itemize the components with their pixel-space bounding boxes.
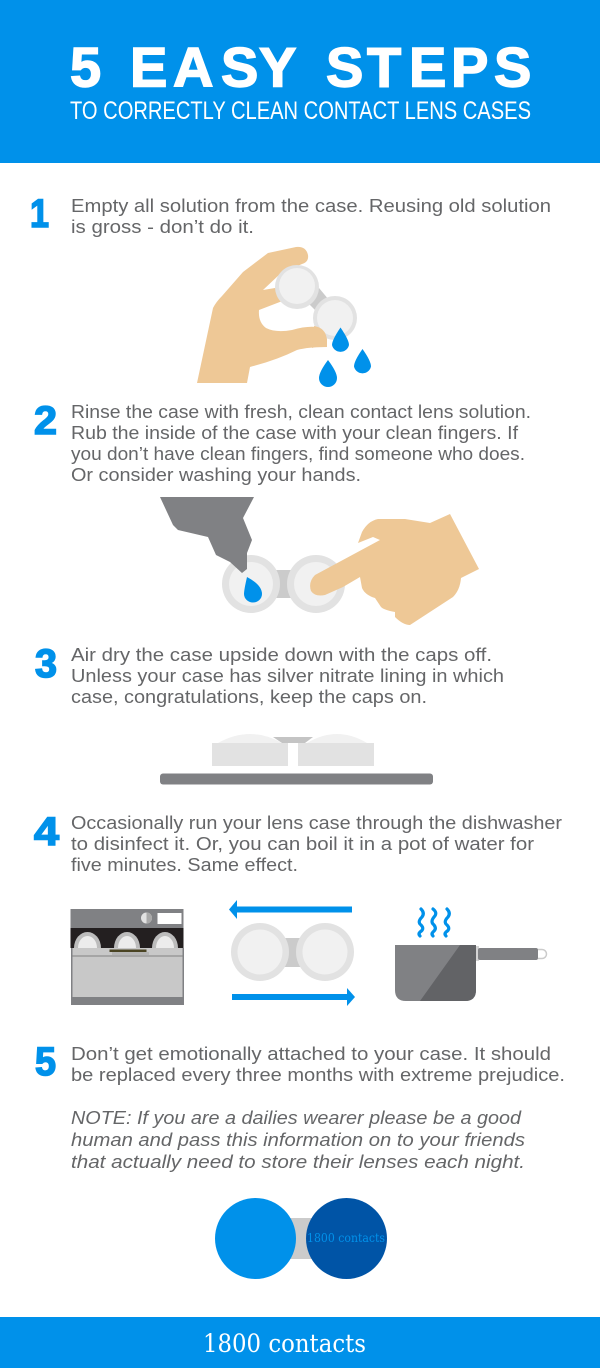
step 2 text bbox=[71, 402, 531, 485]
icon: drop bbox=[244, 577, 262, 602]
icon: drop bbox=[354, 349, 371, 373]
pointing hand bbox=[310, 514, 479, 625]
footer logo: 1800 contacts bbox=[203, 1329, 366, 1358]
step 3 bbox=[35, 642, 504, 784]
step 2 text: Rinse the case with fresh, clean contact lens solution. bbox=[71, 402, 531, 422]
footer bbox=[0, 1317, 600, 1368]
step 3 text bbox=[71, 645, 504, 707]
icon: branded case: 1800 contacts bbox=[307, 1231, 385, 1245]
step 4 number: 4 bbox=[34, 810, 60, 854]
solution bottle bbox=[160, 497, 254, 573]
step 1 text: Empty all solution from the case. Reusing old solution bbox=[71, 196, 551, 216]
icon: boiling pot bbox=[395, 909, 546, 1001]
step 2 bbox=[34, 399, 531, 625]
step 3 text: case, congratulations, keep the caps on. bbox=[71, 687, 427, 707]
step 1 bbox=[30, 192, 551, 387]
step 5 text bbox=[71, 1044, 565, 1085]
step 2 number: 2 bbox=[34, 399, 57, 443]
note: NOTE: If you are a dailies wearer please be a good bbox=[71, 1108, 522, 1128]
header banner bbox=[0, 0, 600, 163]
step 5 number: 5 bbox=[35, 1040, 56, 1084]
step 4 text: five minutes. Same effect. bbox=[71, 855, 298, 875]
step 2 text: Rub the inside of the case with your clean fingers. If bbox=[71, 423, 519, 443]
step 1 number: 1 bbox=[30, 192, 49, 236]
icon: hand holding case with drops bbox=[197, 247, 371, 387]
step 4 text: Occasionally run your lens case through the dishwasher bbox=[71, 813, 562, 833]
step 4 bbox=[34, 810, 562, 1006]
step 4 text: to disinfect it. Or, you can boil it in a pot of water for bbox=[71, 834, 534, 854]
icon: dishwasher bbox=[70, 909, 184, 1005]
step 5 text: be replaced every three months with extreme prejudice. bbox=[71, 1065, 565, 1085]
icon: case drying upside down on rack bbox=[160, 734, 433, 784]
step 3 text: Air dry the case upside down with the caps off. bbox=[71, 645, 492, 665]
step 4 text bbox=[71, 813, 562, 875]
step 2 text: you don’t have clean fingers, find someone who does. bbox=[71, 444, 525, 464]
arrow: right bbox=[232, 988, 355, 1006]
step 2 text: Or consider washing your hands. bbox=[71, 465, 361, 485]
icon: branded case bbox=[215, 1198, 387, 1279]
step 5 bbox=[35, 1040, 565, 1279]
title: 5 EASY STEPS bbox=[70, 36, 531, 98]
steam bbox=[419, 909, 449, 936]
step 3 number: 3 bbox=[35, 642, 57, 686]
step 5 text: Don’t get emotionally attached to your case. It should bbox=[71, 1044, 551, 1064]
step 3 text: Unless your case has silver nitrate lining in which bbox=[71, 666, 504, 686]
icon: drop bbox=[332, 328, 349, 352]
note bbox=[71, 1108, 525, 1172]
arrow: left bbox=[229, 900, 352, 919]
step 1 text: is gross - don’t do it. bbox=[71, 217, 254, 237]
icon: solution bottle, case and pointing hand bbox=[160, 497, 479, 625]
icon: case with arrows bbox=[229, 900, 355, 1006]
note: that actually need to store their lenses each night. bbox=[71, 1152, 525, 1172]
step 1 text bbox=[71, 196, 551, 237]
icon: drop bbox=[319, 360, 337, 387]
note: human and pass this information on to your friends bbox=[71, 1130, 525, 1150]
